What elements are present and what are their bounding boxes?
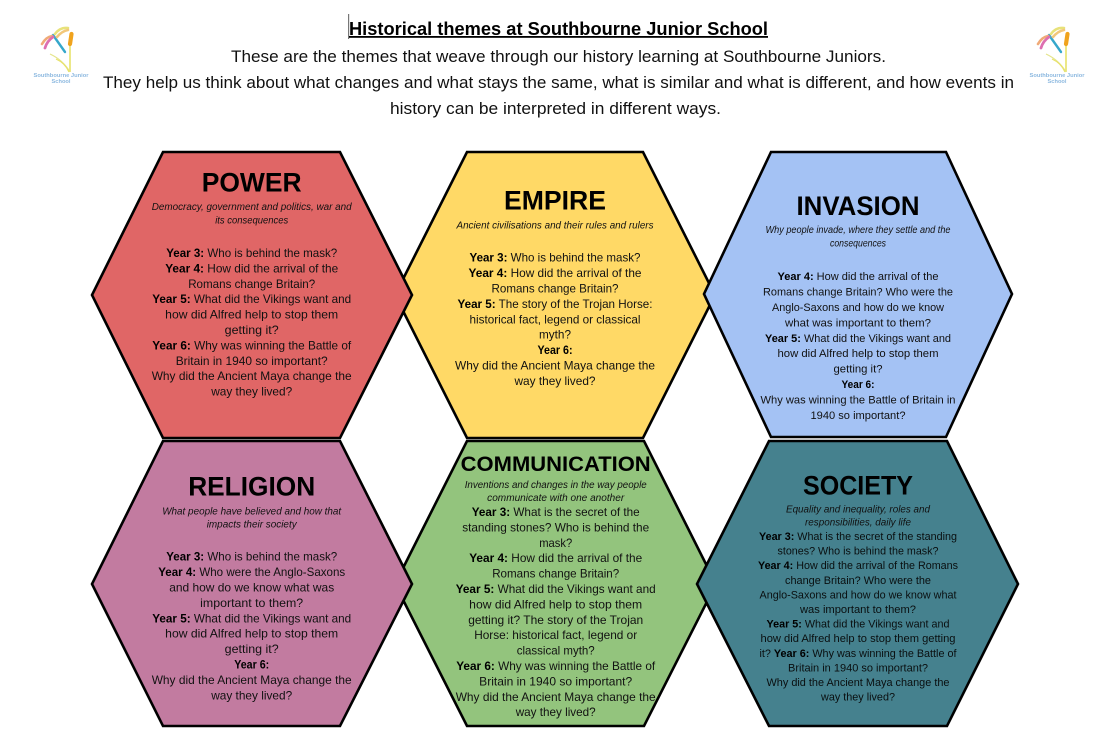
panel: invasion (704, 152, 1012, 437)
questions: religion: Year 3: Who is behind the mask? (166, 550, 338, 564)
icon: school logo left: Southbourne Junior (34, 73, 89, 79)
description: communication: communicate with one another (487, 493, 625, 504)
description: invasion (766, 225, 951, 250)
questions: religion: important to them? (200, 596, 304, 610)
questions: religion: Year 4: Who were the Anglo-Saxons (158, 565, 345, 579)
icon: school logo right (1030, 28, 1085, 85)
panel: communication (395, 441, 716, 726)
questions: society: Year 4: How did the arrival of the Romans (758, 560, 958, 572)
description: empire: Ancient civilisations and their rules and rulers (456, 220, 654, 231)
questions: empire: way they lived? (514, 374, 596, 388)
questions: empire: Year 4: How did the arrival of the (468, 266, 642, 280)
description: religion (162, 506, 342, 531)
description: religion: impacts their society (207, 520, 298, 531)
questions: power: how did Alfred help to stop them (165, 308, 338, 322)
description: power (152, 202, 352, 226)
heading: empire: EMPIRE (504, 186, 606, 216)
questions: religion: how did Alfred help to stop them (165, 627, 338, 641)
questions: society: it? Year 6: Why was winning the Battle of (760, 648, 957, 660)
questions: society (758, 531, 958, 704)
heading: power: POWER (202, 168, 302, 198)
questions: religion: Year 5: What did the Vikings want and (152, 611, 351, 625)
questions: empire: myth? (539, 328, 571, 342)
questions: power: getting it? (225, 323, 279, 337)
questions: society: Britain in 1940 so important? (788, 662, 928, 674)
questions: society: stones? Who is behind the mask? (778, 546, 938, 558)
questions: invasion: getting it? (834, 364, 882, 376)
questions: society: Why did the Ancient Maya change the (766, 677, 950, 689)
questions: invasion: Anglo-Saxons and how do we know (772, 302, 945, 314)
questions: communication: Year 6: Why was winning the Battle of (456, 659, 656, 673)
questions: invasion (760, 271, 956, 422)
questions: society: Year 5: What did the Vikings want and (766, 619, 950, 631)
questions: religion (152, 550, 352, 702)
questions: communication: Britain in 1940 so important? (479, 674, 633, 688)
questions: communication (456, 505, 656, 719)
questions: invasion: Year 6: (842, 379, 874, 391)
questions: empire: Why did the Ancient Maya change the (455, 358, 655, 372)
questions: invasion: Romans change Britain? Who were the (763, 286, 953, 298)
questions: society: how did Alfred help to stop them getting (760, 633, 956, 645)
questions: communication: Year 4: How did the arrival of the (469, 551, 643, 565)
questions: communication: way they lived? (515, 705, 596, 719)
questions: communication: Horse: historical fact, legend or (474, 628, 637, 642)
description: society (786, 505, 930, 529)
description: communication (465, 480, 647, 504)
questions: communication: mask? (539, 536, 573, 550)
description: power: its consequences (215, 215, 288, 226)
panel: empire (395, 152, 715, 438)
questions: communication: Year 5: What did the Vikings want and (456, 582, 656, 596)
questions: power: Year 3: Who is behind the mask? (166, 246, 338, 260)
questions: empire: Year 3: Who is behind the mask? (470, 251, 641, 265)
panel: society (697, 441, 1018, 726)
icon: school logo right: School (1048, 79, 1067, 85)
description: power: Democracy, government and politics, war and (152, 202, 352, 213)
questions: communication: how did Alfred help to stop them (469, 597, 642, 611)
questions: invasion: 1940 so important? (810, 410, 906, 422)
panel: religion (92, 441, 412, 726)
questions: empire: Year 6: (538, 343, 572, 357)
questions: communication: standing stones? Who is behind the (462, 520, 650, 534)
questions: empire: Romans change Britain? (492, 282, 619, 296)
questions: invasion: Year 4: How did the arrival of the (778, 271, 938, 283)
questions: society: way they lived? (820, 692, 895, 704)
questions: religion: Year 6: (234, 658, 269, 672)
heading: invasion: INVASION (796, 191, 920, 221)
questions: communication: Year 3: What is the secret of the (472, 505, 640, 519)
description: society: responsibilities, daily life (805, 518, 911, 529)
icon: school logo left (34, 28, 89, 85)
heading: society: SOCIETY (803, 470, 913, 500)
description: communication: Inventions and changes in the way people (465, 480, 647, 491)
questions: society: Anglo-Saxons and how do we know what (760, 589, 957, 601)
questions: invasion: how did Alfred help to stop them (778, 348, 938, 360)
questions: communication: classical myth? (517, 644, 595, 658)
questions: society: was important to them? (799, 604, 916, 616)
questions: power: Year 6: Why was winning the Battle of (152, 338, 352, 352)
questions: power: way they lived? (210, 385, 293, 399)
heading: communication: COMMUNICATION (461, 453, 651, 476)
intro text (103, 47, 1014, 118)
heading: religion: RELIGION (188, 472, 315, 502)
questions: power: Year 5: What did the Vikings want and (152, 292, 351, 306)
description: religion: What people have believed and how that (162, 506, 342, 517)
icon: school logo right: Southbourne Junior (1030, 73, 1085, 79)
questions: communication: Why did the Ancient Maya change the (456, 690, 656, 704)
description: society: Equality and inequality, roles and (786, 505, 930, 516)
questions: empire (455, 251, 655, 388)
questions: religion: getting it? (225, 642, 279, 656)
questions: empire: historical fact, legend or classical (470, 312, 640, 326)
questions: religion: way they lived? (210, 688, 293, 702)
description: invasion: Why people invade, where they settle and the (766, 225, 951, 236)
questions: religion: Why did the Ancient Maya change the (152, 673, 352, 687)
questions: power: Year 4: How did the arrival of the (165, 261, 339, 275)
intro text: They help us think about what changes and what stays the same, what is similar and what is different, and how events in (103, 73, 1014, 92)
icon: school logo left: School (52, 79, 71, 85)
intro text: history can be interpreted in different ways. (390, 99, 721, 118)
panel: power (92, 152, 412, 438)
questions: invasion: what was important to them? (784, 317, 931, 329)
questions: society: change Britain? Who were the (785, 575, 931, 587)
description: invasion: consequences (830, 239, 886, 250)
questions: communication: getting it? The story of the Trojan (468, 613, 643, 627)
questions: power: Romans change Britain? (188, 277, 316, 291)
questions: invasion: Why was winning the Battle of Britain in (760, 395, 956, 407)
questions: society: Year 3: What is the secret of the standing (759, 531, 957, 543)
title: Historical themes at Southbourne Junior School (349, 19, 768, 39)
questions: power: Britain in 1940 so important? (176, 354, 328, 368)
questions: empire: Year 5: The story of the Trojan Horse: (458, 297, 652, 311)
questions: invasion: Year 5: What did the Vikings want and (765, 333, 951, 345)
intro text: These are the themes that weave through our history learning at Southbourne Juniors. (231, 47, 886, 66)
questions: communication: Romans change Britain? (492, 567, 620, 581)
questions: power: Why did the Ancient Maya change the (152, 369, 352, 383)
questions: religion: and how do we know what was (169, 580, 334, 594)
questions: power (152, 246, 352, 399)
